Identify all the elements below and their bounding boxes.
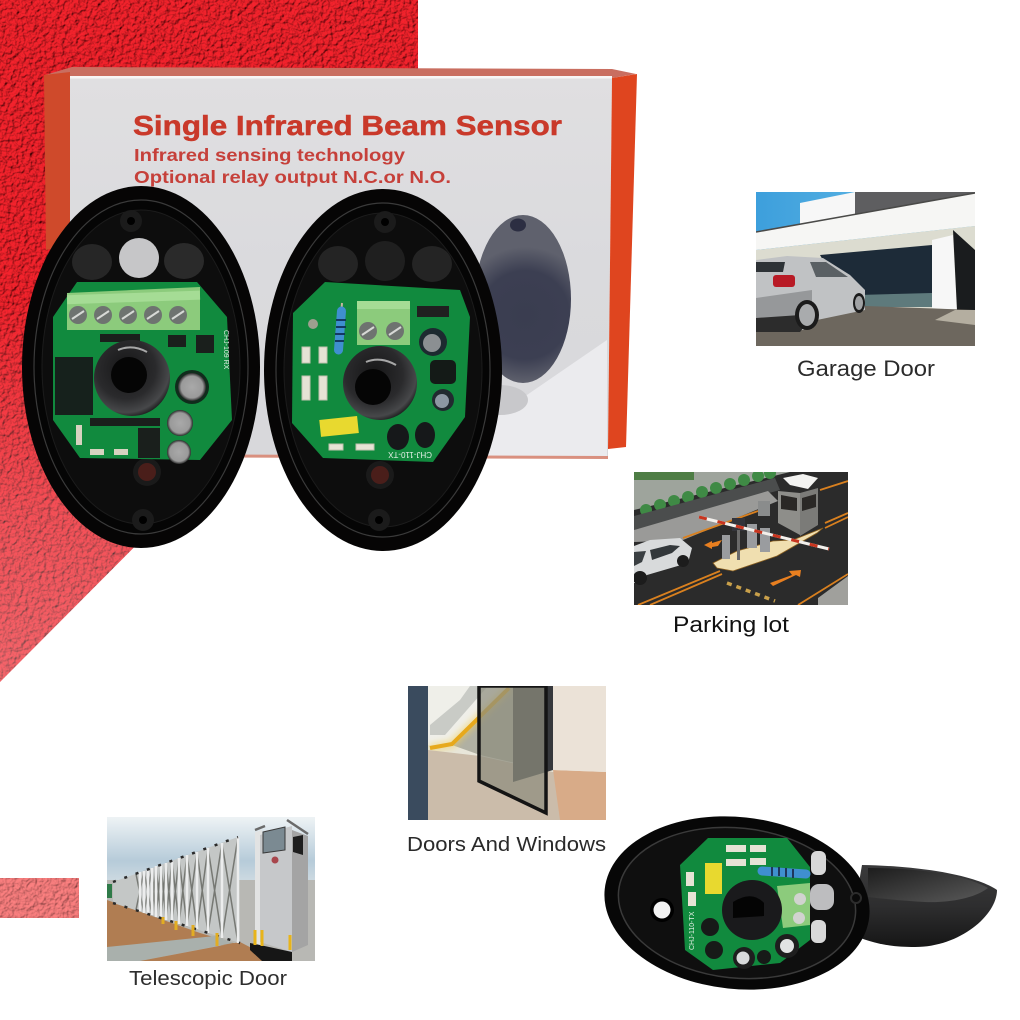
electrolytic capacitors	[419, 328, 456, 411]
sky	[756, 192, 975, 252]
right sensor: transmitter	[264, 189, 502, 551]
yellow capacitor	[319, 416, 359, 437]
red textured background	[0, 0, 418, 682]
indicator LEDs	[76, 425, 128, 455]
capacitors and transistors	[701, 918, 799, 969]
small SMD parts	[302, 347, 374, 450]
island	[713, 528, 823, 571]
floor	[428, 750, 560, 820]
housing	[22, 186, 260, 548]
transistors	[387, 422, 435, 450]
dark entrance	[953, 230, 975, 310]
mounting screw on board	[308, 319, 318, 329]
circuit board	[680, 838, 810, 970]
road markings	[638, 481, 848, 605]
soffit	[756, 226, 975, 310]
arrows	[704, 540, 801, 586]
dark components	[90, 334, 214, 458]
green fence far left	[107, 884, 112, 898]
housing	[264, 189, 502, 551]
open sensor with dome cover	[596, 804, 997, 1002]
paved ground tan front	[140, 942, 277, 961]
car	[756, 256, 865, 332]
lattice top caps	[113, 837, 238, 882]
parked car	[633, 538, 692, 585]
board marking: CHJ-110-TX	[387, 450, 432, 459]
cover screw	[851, 893, 861, 903]
red strip accent	[0, 878, 79, 918]
speed bump dots	[727, 583, 775, 601]
label: Parking lot: Parking lot	[673, 612, 789, 637]
road	[634, 472, 848, 605]
photo: garage door	[756, 192, 975, 346]
sky	[107, 817, 315, 880]
box feature line 1: Infrared sensing technology	[134, 145, 405, 165]
lens	[722, 880, 782, 940]
yellow capacitor	[705, 863, 722, 894]
LED strip glow	[430, 688, 509, 748]
label: Telescopic Door: Telescopic Door	[129, 968, 287, 990]
lens	[343, 346, 417, 420]
driveway	[756, 306, 975, 346]
terminal block	[777, 883, 810, 928]
photo: parking lot	[633, 467, 848, 605]
label: Garage Door: Garage Door	[797, 356, 935, 381]
box bottom edge	[72, 454, 608, 459]
open door leaf	[513, 686, 553, 782]
face lower wave panel	[480, 340, 607, 456]
box top band	[45, 67, 636, 78]
board marking: CHJ-110-TX	[689, 911, 696, 950]
sidewalk	[634, 491, 778, 542]
wall under hedge	[634, 478, 780, 530]
grey wall	[855, 192, 975, 214]
product box	[44, 67, 637, 459]
box front face	[70, 77, 612, 457]
back wall	[428, 745, 602, 772]
booth	[778, 474, 818, 536]
housing	[596, 804, 878, 1002]
photo: telescopic door	[107, 817, 315, 961]
sensor picture on box	[472, 215, 571, 415]
LED strip	[430, 688, 509, 748]
face highlight strip	[70, 76, 612, 78]
paved stripe	[107, 936, 233, 961]
cable holes	[810, 851, 834, 943]
lens	[94, 340, 170, 416]
lattice uprights	[140, 837, 238, 943]
lattice crosses	[136, 837, 238, 943]
photo: doors and windows	[408, 686, 606, 820]
white fascia	[756, 193, 975, 250]
stairs wall	[428, 686, 477, 745]
resistor	[762, 871, 806, 874]
mounting holes	[318, 211, 452, 531]
distant ground	[107, 880, 315, 961]
dome cover	[850, 865, 997, 947]
paved ground tan	[107, 900, 240, 947]
terminal block	[67, 287, 200, 330]
label: Doors And Windows: Doors And Windows	[407, 834, 606, 856]
resistor	[335, 303, 346, 354]
capacitors	[167, 370, 209, 464]
mounting holes	[72, 210, 204, 531]
SMD diodes	[686, 845, 766, 906]
kerb	[818, 576, 848, 605]
box right flap	[608, 74, 637, 449]
fence backdrop	[634, 472, 790, 510]
box left flap	[44, 72, 71, 250]
diode D1	[417, 306, 449, 317]
pillar	[932, 235, 957, 310]
barrier arm	[699, 517, 829, 549]
glass door	[479, 686, 546, 813]
gate cabinet	[250, 820, 308, 961]
gate lattice	[113, 837, 240, 943]
upper white wall	[800, 192, 855, 224]
box feature line 2: Optional relay output N.C.or N.O.	[134, 167, 451, 187]
yellow wheel guards	[163, 917, 217, 946]
board marking: CHJ-109 RX	[222, 330, 229, 370]
lattice feet	[113, 903, 240, 943]
circuit board	[292, 282, 470, 462]
relay	[55, 357, 93, 415]
terminal block	[357, 301, 410, 345]
barrier gate posts	[722, 501, 770, 560]
circuit board	[53, 282, 232, 460]
garage door panel	[820, 245, 932, 307]
mounting hole	[650, 898, 674, 922]
left dark panel	[408, 686, 428, 820]
hedge row	[634, 472, 776, 514]
box title: Single Infrared Beam Sensor	[133, 110, 562, 141]
right wall	[554, 770, 604, 772]
left sensor: receiver	[22, 186, 260, 548]
